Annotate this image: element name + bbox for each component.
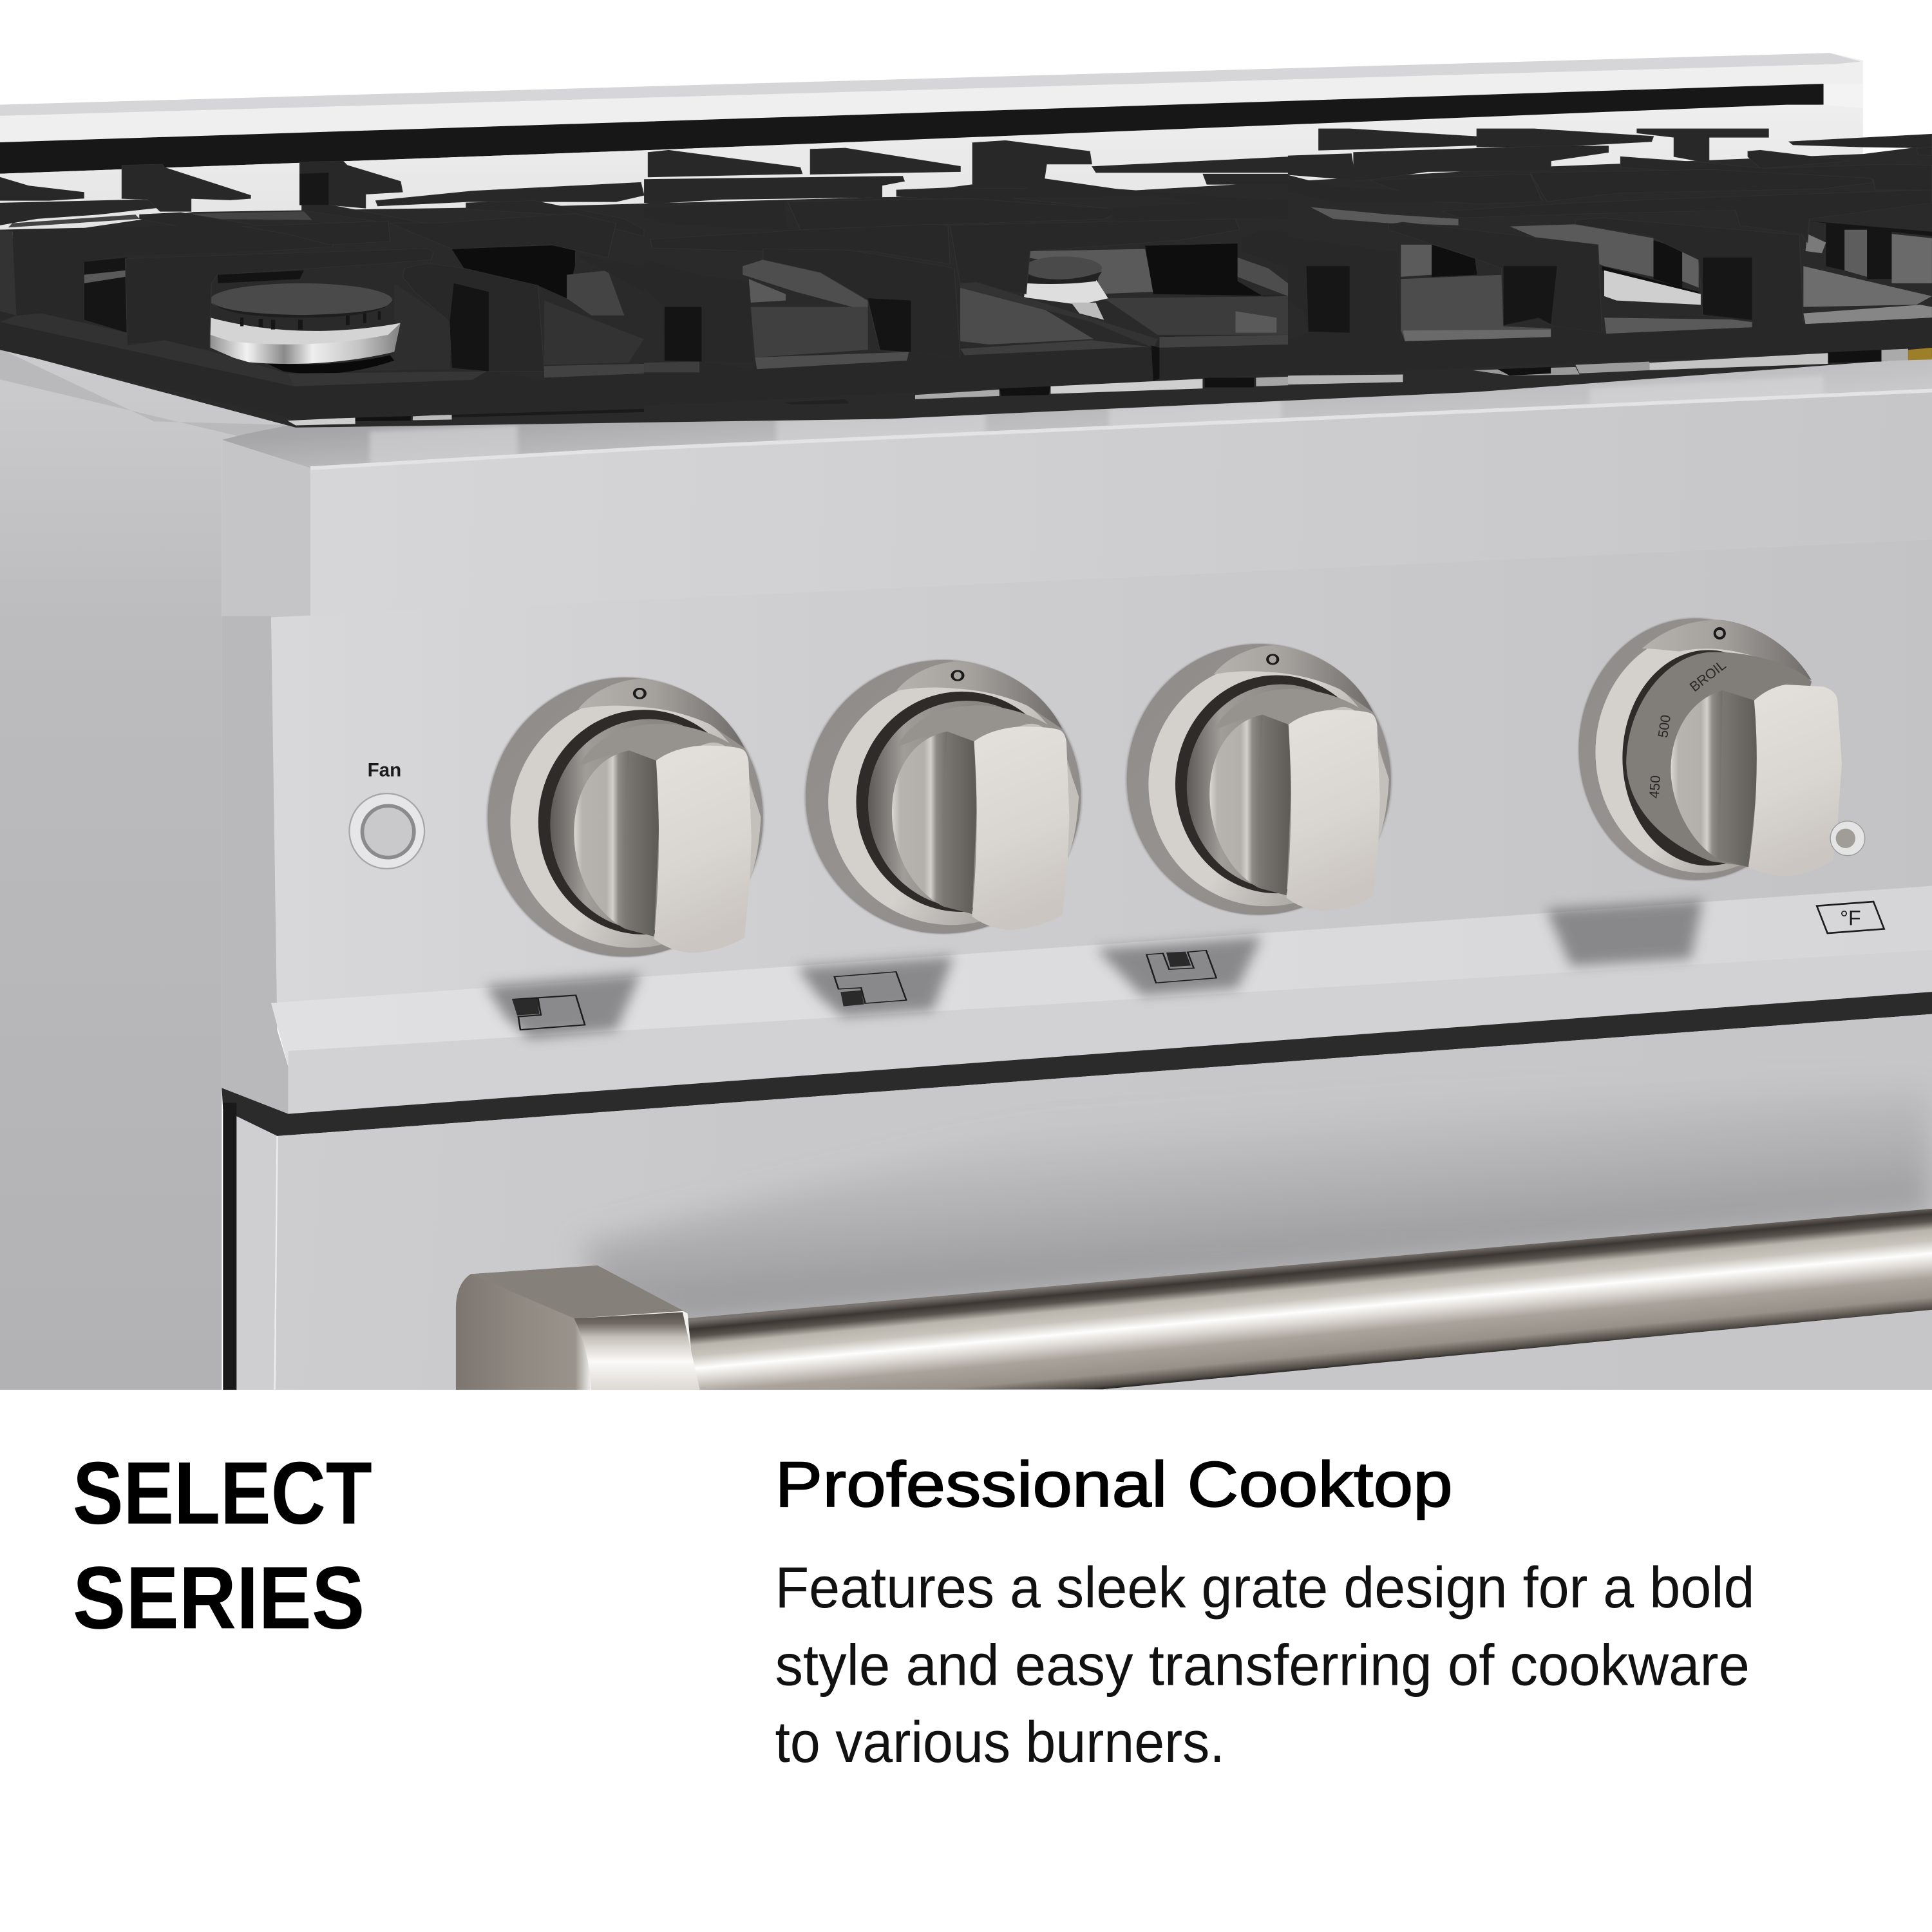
front band [644,335,1288,406]
cap top face [471,1265,684,1318]
fan button [349,759,424,869]
floor [8,211,644,426]
feature description [775,1556,1754,1775]
floor [1288,207,1932,384]
series title [73,1444,372,1647]
raised diagonal [960,282,1157,348]
lip highlight [310,391,1932,468]
knob shadows [486,900,1703,1039]
metal [1288,129,1932,375]
shaded faces [1307,258,1752,333]
reflections under grate [1288,375,1403,384]
door bevel highlight [275,1136,277,1390]
series title: SERIES [73,1548,365,1647]
dial numbers: 450 [1647,775,1663,799]
series title: SELECT [73,1444,372,1543]
burner icon 3 [1146,951,1217,983]
front band [0,311,644,420]
temperature unit icon [1817,902,1884,933]
photo: range [0,50,1932,1390]
cooktop tray [0,146,1932,428]
control panel [271,540,1932,1005]
burner icon 2 [835,972,906,1007]
handle end cap [456,1265,695,1390]
shelf lower band [289,950,1932,1114]
burner: middle [1024,256,1108,320]
cooktop surface [222,352,1932,468]
shaded faces and strips [0,173,644,386]
knob 4: oven temperature dial [1578,618,1865,881]
knob 2 [804,659,1082,934]
grates: right section [1288,129,1932,384]
white footer [0,1390,1932,1932]
door gap line [223,1103,236,1390]
grates: left section [0,161,644,426]
shaded faces and strips [644,298,1288,381]
dark gap [222,992,1932,1136]
panel shelf [271,886,1932,1114]
feature description: style and easy transferring of cookware [775,1633,1750,1698]
door bevel [236,1116,277,1390]
feature description: Features a sleek grate design for a bold [775,1556,1754,1620]
door [274,1014,1932,1390]
feature heading: Professional Cooktop [775,1449,1453,1520]
backsplash [0,53,1863,234]
door reflection [579,1084,1932,1325]
grates: middle section [644,140,1288,406]
dial numbers: BROIL [1687,657,1729,695]
knob 1 [486,677,764,958]
metal [0,161,644,420]
indicator light [1830,821,1865,856]
surface reflections [370,376,1824,466]
metal [644,140,1288,406]
lip side [222,440,310,862]
handle collar [574,1312,700,1390]
fan label: Fan [368,759,401,781]
left side panel [0,348,296,1390]
temperature unit icon: °F [1840,907,1861,930]
knob 3 [1126,643,1392,916]
oven handle [456,1209,1932,1390]
dial numbers [1647,657,1729,799]
floor [743,243,1288,404]
reflections under grate [287,417,355,426]
burner icon 1 [512,995,585,1030]
left side top edge [0,348,296,437]
feature description: to various burners. [775,1710,1225,1775]
burner: front left [210,283,401,374]
dial numbers: 500 [1655,714,1674,739]
handle bar [687,1209,1932,1390]
reflections under grate [915,390,999,399]
lip front [310,391,1932,616]
white zone right of backsplash [1863,50,1932,160]
panel left lower side [222,616,289,1114]
